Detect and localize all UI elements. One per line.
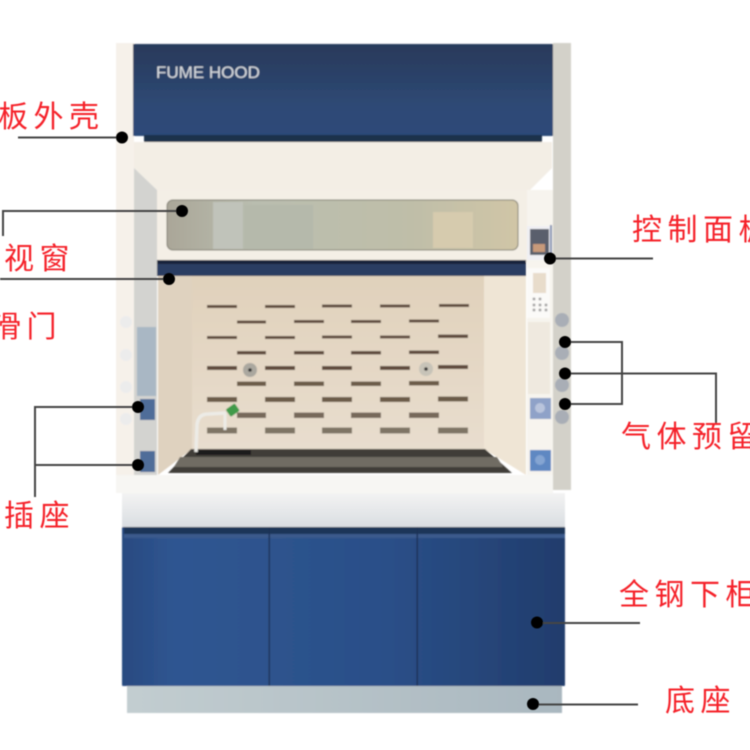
right switch panel <box>527 268 550 318</box>
callout: viewing window: 视窗 <box>4 243 75 276</box>
green valve <box>226 403 240 417</box>
perforated back panel <box>192 276 484 449</box>
left sockets <box>140 399 155 472</box>
front sill <box>116 475 553 493</box>
dark worktop <box>168 449 512 473</box>
right drain fitting <box>419 362 433 376</box>
left blue-grey panel <box>137 327 156 396</box>
top blue panel <box>133 44 553 142</box>
callout: control panel <box>544 214 750 264</box>
interior side walls <box>158 276 526 475</box>
callout: sockets <box>4 401 144 533</box>
window frame <box>157 190 527 262</box>
baffle slots <box>207 304 469 434</box>
callout: base <box>527 685 736 718</box>
right side column <box>527 190 553 490</box>
callout: base: 底座 <box>665 685 736 718</box>
apron <box>122 493 565 527</box>
right sockets <box>530 398 551 471</box>
callout: outer shell: 板外壳 <box>0 101 104 134</box>
callout: sliding door <box>0 273 175 344</box>
viewing window <box>167 200 518 250</box>
right control panel <box>527 225 552 260</box>
callout: sockets: 插座 <box>4 500 75 533</box>
callout: gas reserved <box>559 336 750 454</box>
plinth base <box>127 686 562 713</box>
callout: steel cabinet <box>531 579 750 628</box>
sash door handle <box>157 260 526 276</box>
left side column <box>134 168 157 490</box>
outer frame <box>116 43 571 490</box>
right gas knobs <box>555 313 569 424</box>
steel lower cabinet <box>122 527 565 686</box>
chamfered header <box>134 142 552 190</box>
fume hood cabinet <box>116 43 571 713</box>
left drain fitting <box>243 363 257 377</box>
callout: outer shell <box>0 101 128 144</box>
callout: viewing window <box>3 205 188 276</box>
brand text: FUME HOOD <box>156 63 260 82</box>
water faucet <box>196 403 240 452</box>
left gas knobs <box>120 316 132 425</box>
right recessed panel <box>528 322 550 394</box>
